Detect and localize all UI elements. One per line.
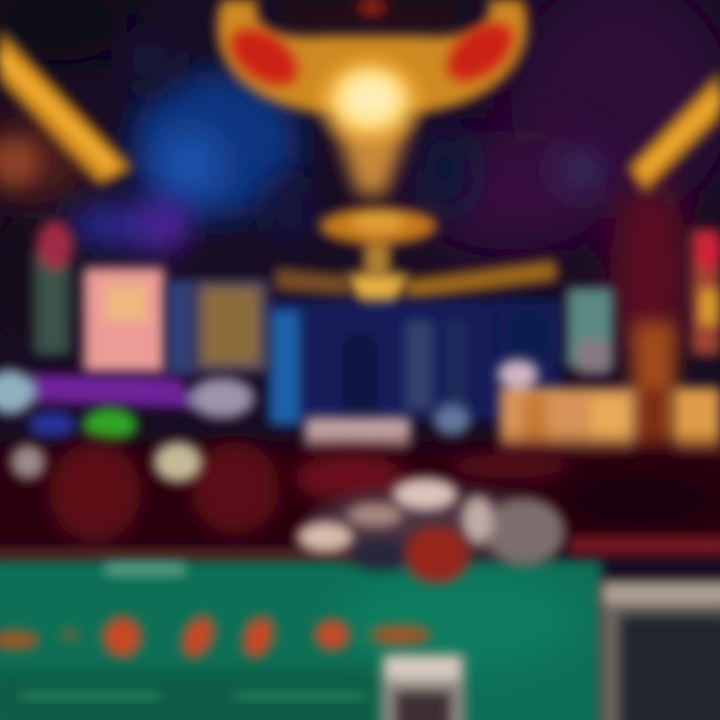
- chips pile: [297, 478, 565, 583]
- left side: purple table edge: [0, 370, 254, 439]
- chandelier: lower gold dish: [320, 208, 436, 275]
- left wall: pink lit screen: [84, 268, 164, 372]
- betting markers on felt: [0, 611, 430, 663]
- right wall: orange column: [632, 322, 676, 452]
- left wall: tan panel: [194, 280, 268, 372]
- left wall: tall slot sign: [34, 221, 73, 355]
- gold horizontal band: [275, 260, 558, 300]
- right wall: bright sign: [692, 230, 720, 355]
- foreground: grey machine right: [600, 580, 720, 720]
- chandelier: red glass panels: [220, 11, 523, 97]
- left gold ceiling beam: [0, 30, 132, 186]
- chandelier: bottom pendant: [345, 274, 410, 322]
- left side: green light: [83, 408, 137, 442]
- right side: orange lit machines: [498, 360, 720, 458]
- foreground: white box: [382, 654, 464, 720]
- chandelier: central light and stem: [308, 48, 432, 195]
- chandelier: [217, 0, 527, 322]
- centre: white and pink machines: [305, 404, 470, 452]
- ceiling: blue lit patch: [65, 30, 602, 251]
- maroon seating row: [0, 442, 720, 550]
- left wall: blue-grey frame: [167, 280, 195, 375]
- small lamps on left tables: [11, 442, 202, 482]
- green felt table: [0, 536, 720, 720]
- chandelier: gold arms: [217, 0, 527, 112]
- right wall: teal slot machine: [567, 288, 613, 374]
- right gold ceiling beam: [628, 72, 720, 192]
- blue back panels: [268, 300, 560, 425]
